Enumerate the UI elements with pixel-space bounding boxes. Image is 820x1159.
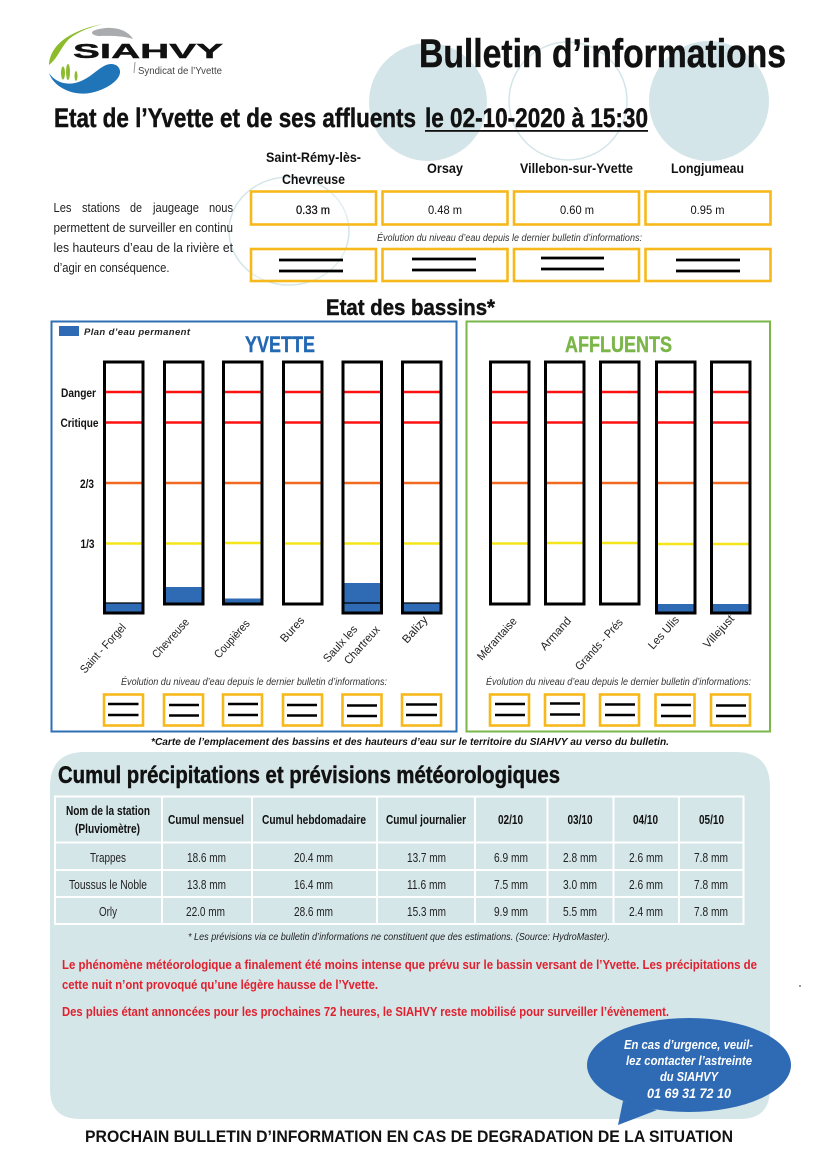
gauge: Bures [284,362,322,604]
gauge names: tributaries: Armand [538,615,574,653]
row: Trappes: 2.8 mm [563,851,597,865]
station names: Orsay [427,160,463,176]
text block: gauging stations intro: de [130,201,142,215]
table header: Cumul journalier [386,813,466,827]
text block: red situation notice: Le phénomène météorologique a finalement été moins intense que prévu sur le bassin versant de l’Yvette. Les précipitations de [62,958,757,972]
water level value boxes: 0.60 m [560,203,594,217]
threshold labels: Critique [60,416,99,430]
table header: Nom de la station [66,804,150,818]
table header: 04/10 [633,813,658,827]
gauge names: Yvette: Saint - Forgel [78,622,129,676]
row: Orly: 7.8 mm [694,905,728,919]
gauge: Armand [546,362,584,604]
water level value boxes: 0.95 m [690,203,725,217]
table header: 02/10 [498,813,523,827]
text block: gauging stations intro: stations [82,201,120,215]
heading: basins: Etat des bassins* [326,295,495,320]
row: Trappes: Trappes [90,851,126,865]
caption: level evolution Yvette: Évolution du niveau d’eau depuis le dernier bulletin d’informations: [121,675,387,688]
gauge names: Yvette: Balizy [400,614,431,646]
row: Trappes [90,851,728,865]
station names: Saint-Rémy-lès- [266,149,361,165]
gauge names: Yvette: Coupières [212,618,253,661]
table header: 05/10 [699,813,724,827]
heading: state of the Yvette with date: Etat de l’Yvette et de ses affluents [54,103,416,133]
evolution indicators: Yvette [104,694,441,726]
row: Orly: 9.9 mm [494,905,528,919]
gauge names: tributaries [475,613,738,673]
logo: SIAHVY [49,24,224,94]
footnote: forecast source: * Les prévisions via ce bulletin d’informations ne constituent que des estimations. (Source: HydroMaster). [188,932,610,943]
legend: permanent water: Plan d’eau permanent [84,327,191,338]
water level value boxes: 0.48 m [428,203,462,217]
text block: gauging stations intro: les hauteurs d’eau de la rivière et [54,241,234,255]
heading: precipitation: Cumul précipitations et prévisions météorologiques [58,762,560,789]
row: Toussus le Noble: 16.4 mm [294,878,333,892]
threshold labels: 2/3 [80,477,94,491]
table header: Cumul hebdomadaire [262,813,366,827]
gauge names: Yvette: Chevreuse [150,617,192,661]
text block: gauging stations intro [54,201,234,275]
row: Orly: 5.5 mm [563,905,597,919]
footnote: basin map: *Carte de l’emplacement des bassins et des hauteurs d’eau sur le territoire du SIAHVY au verso du bulletin. [151,736,669,748]
evolution indicators: stations [251,249,770,281]
gauge names: tributaries: Mérantaise [475,616,520,663]
row: Toussus le Noble: Toussus le Noble [69,878,147,892]
callout: emergency contact: du SIAHVY [660,1069,719,1084]
row: Trappes: 18.6 mm [187,851,226,865]
table header: 03/10 [568,813,593,827]
decorative header circles [229,41,769,285]
panel: precipitation and forecasts [50,752,770,1119]
gauge: Mérantaise [490,362,529,604]
gauge: Chevreuse [164,362,203,604]
water level value boxes: 0.33 m [296,203,330,217]
heading: state of the Yvette with date: le 02-10-2020 à 15:30 [425,103,648,133]
text block: red situation notice [62,958,757,1019]
water level value boxes [251,192,770,224]
row: Toussus le Noble: 13.8 mm [187,878,226,892]
gauge names: Yvette [78,614,431,676]
station names: Villebon-sur-Yvette [520,160,633,176]
callout: emergency contact: lez contacter l’astreinte [626,1053,752,1068]
row: Trappes: 13.7 mm [407,851,446,865]
gauge: Saint-Forget [104,362,143,613]
gauge: Saulx les Chartreux [343,362,382,613]
threshold labels [60,386,99,551]
row: Trappes: 6.9 mm [494,851,528,865]
row: Toussus le Noble: 2.6 mm [629,878,663,892]
text block: red situation notice: cette nuit n’ont provoqué qu’une légère hausse de l’Yvette. [62,978,378,992]
evolution indicators: tributaries [490,694,750,726]
gauge: Les Ulis [656,362,695,613]
row: Trappes: 20.4 mm [294,851,333,865]
gauge names: tributaries: Les Ulis [646,614,682,652]
station names: Longjumeau [671,160,744,176]
gauge names: tributaries: Villejust [701,613,738,651]
gauge: Villejust [712,362,750,613]
threshold labels: 1/3 [80,537,95,551]
heading: Yvette: YVETTE [245,332,315,357]
panel: Yvette basins [52,322,456,732]
row: Orly [99,905,728,919]
logo: SIAHVY: Syndicat de l’Yvette [138,66,222,77]
callout: emergency contact: En cas d’urgence, veuil- [624,1037,753,1052]
threshold labels: Danger [61,386,96,400]
row: Trappes: 7.8 mm [694,851,728,865]
row: Toussus le Noble: 7.5 mm [494,878,528,892]
row: Toussus le Noble [69,878,728,892]
row: Toussus le Noble: 7.8 mm [694,878,728,892]
row: Orly: 28.6 mm [294,905,333,919]
heading: Affluents: AFFLUENTS [565,332,672,357]
callout: emergency contact: 01 69 31 72 10 [647,1085,731,1101]
text block: gauging stations intro: nous [209,201,233,215]
station names [266,149,744,187]
row: Toussus le Noble: 3.0 mm [563,878,597,892]
station names: Chevreuse [282,171,345,187]
row: Orly: 2.4 mm [629,905,663,919]
row: Orly: 15.3 mm [407,905,446,919]
gauge: Balizy [402,362,441,613]
caption: level evolution tributaries: Évolution du niveau d’eau depuis le dernier bulletin d’informations: [486,675,751,688]
gauge: Grands-Prés [600,362,639,604]
logo: SIAHVY: SIAHVY [73,41,224,63]
row: Orly: 22.0 mm [186,905,225,919]
table header: Cumul mensuel [168,813,244,827]
gauge names: tributaries: Grands - Prés [573,617,626,673]
caption: level evolution stations: Évolution du niveau d’eau depuis le dernier bulletin d’informations: [377,231,642,244]
row: Orly: Orly [99,905,118,919]
text block: gauging stations intro: permettent de surveiller en continu [54,221,233,235]
callout: emergency contact [587,1018,791,1125]
text block: gauging stations intro: d’agir en conséquence. [54,261,170,275]
panel: tributaries basins [466,322,770,732]
gauge names: Yvette: Saulx les [321,623,360,665]
table header: (Pluviomètre) [75,822,140,836]
gauge names: Yvette: Bures [278,615,307,645]
text block: gauging stations intro: jaugeage [152,201,199,215]
row: Toussus le Noble: 11.6 mm [407,878,446,892]
stray mark [799,985,801,987]
gauge: Coupières [224,362,262,604]
text block: red situation notice: Des pluies étant annoncées pour les prochaines 72 heures, le SIAHVY reste mobilisé pour surveiller l’évènement. [62,1005,669,1019]
footer: next bulletin: PROCHAIN BULLETIN D’INFORMATION EN CAS DE DEGRADATION DE LA SITUATION [85,1127,733,1146]
gauge names: Yvette: Chartreux [342,624,383,667]
row: Trappes: 2.6 mm [629,851,663,865]
table header [66,804,724,836]
text block: gauging stations intro: Les [54,201,72,215]
table: rainfall by station [55,796,744,924]
